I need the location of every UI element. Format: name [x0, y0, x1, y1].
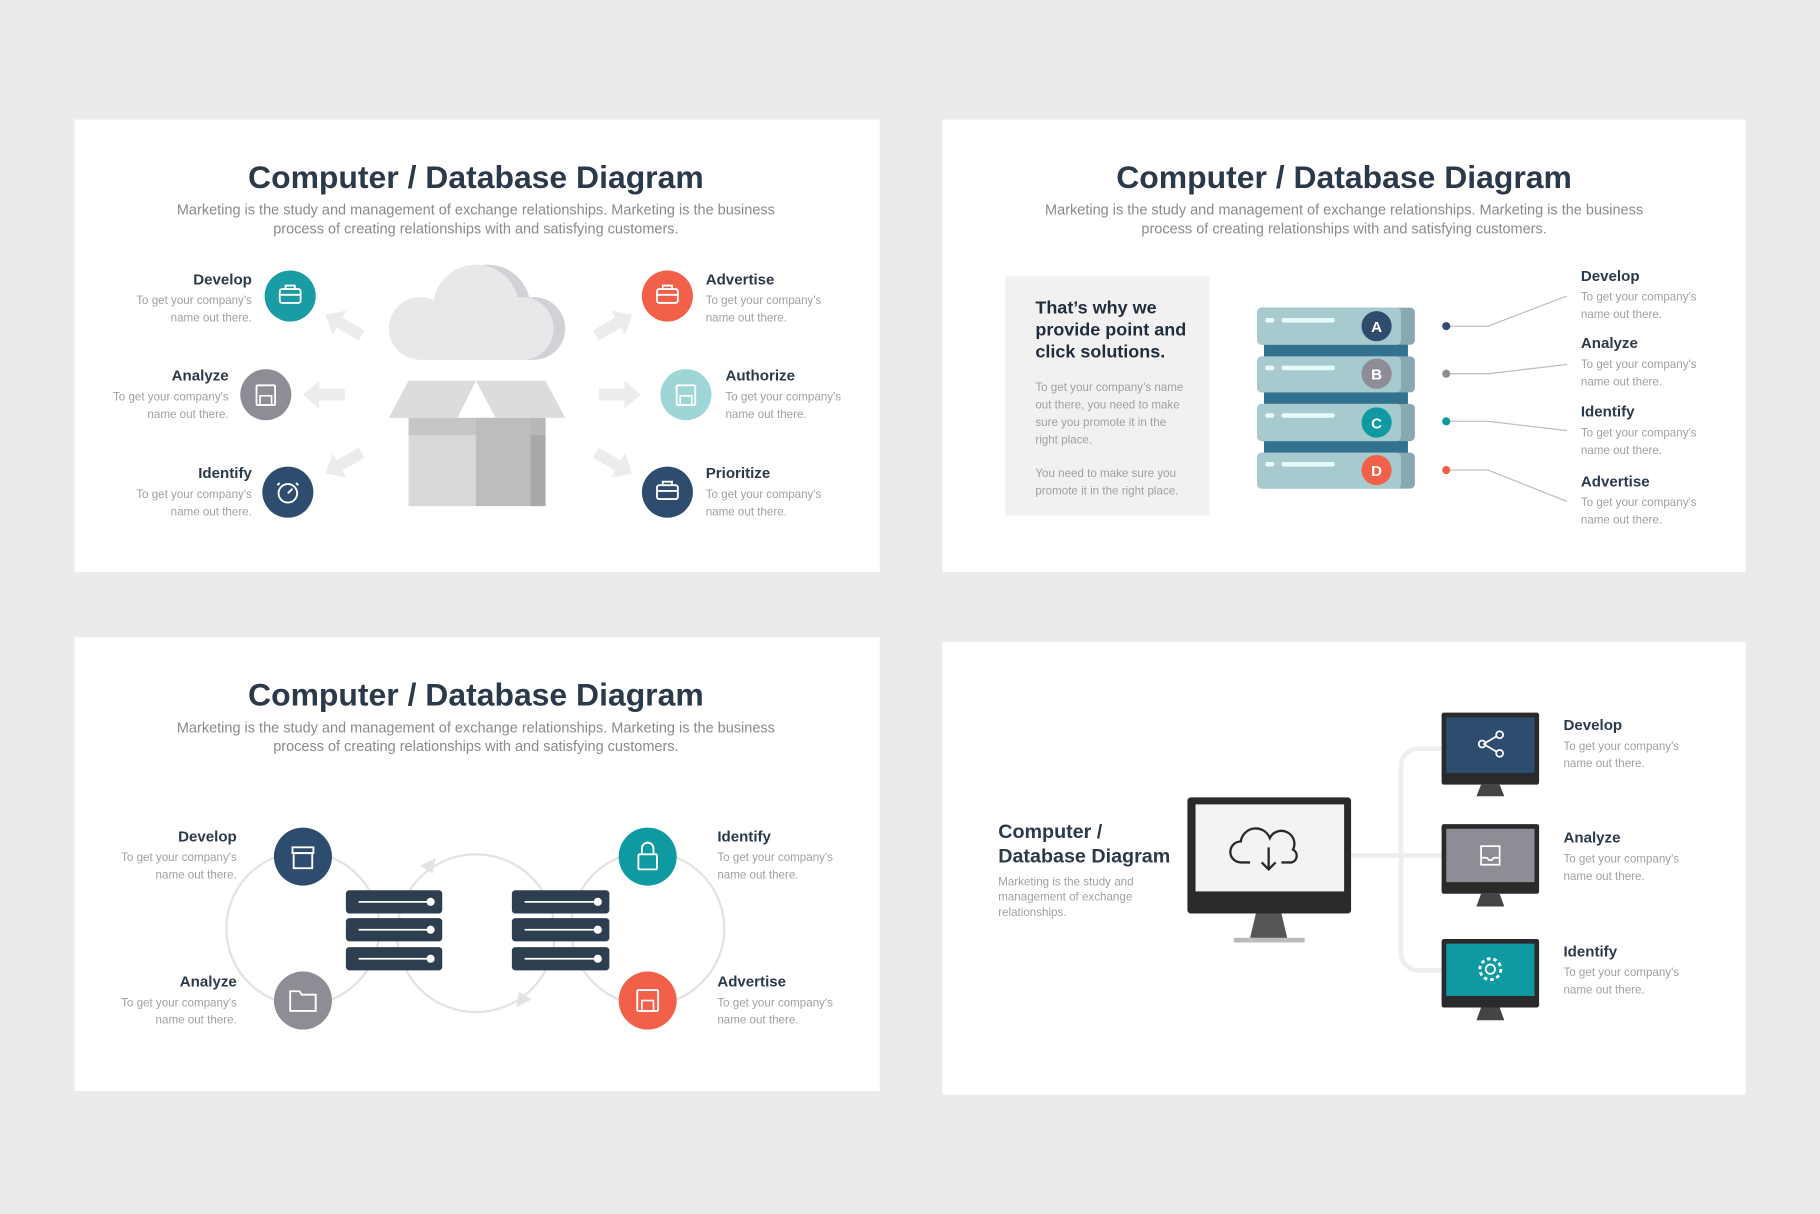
panel: server stack	[942, 120, 1746, 572]
text: advertise	[706, 271, 822, 325]
icon: open box	[389, 381, 565, 506]
text: develop: To get your company's	[121, 851, 237, 864]
text: advertise: Advertise	[1581, 473, 1650, 490]
description: relationships.	[998, 906, 1067, 919]
text: prioritize: To get your company's	[706, 488, 822, 501]
callout box: out there, you need to make	[1035, 399, 1180, 412]
text: prioritize	[706, 465, 822, 518]
panel: server cycle	[74, 638, 880, 1091]
text: identify	[717, 829, 833, 882]
callout box: promote it in the right place.	[1035, 484, 1178, 497]
text: authorize: To get your company's	[725, 390, 841, 403]
subtitle: process of creating relationships with and satisfying customers.	[273, 221, 679, 237]
subtitle	[177, 720, 775, 755]
callout box: click solutions.	[1035, 341, 1165, 361]
icon: monitor identify	[1442, 939, 1539, 1020]
callout box: right place.	[1035, 433, 1092, 446]
subtitle: Marketing is the study and management of exchange relationships. Marketing is the business	[1045, 203, 1643, 219]
subtitle	[1045, 203, 1643, 237]
text: analyze: Analyze	[172, 368, 229, 385]
cycle rings	[226, 852, 724, 1012]
title	[998, 821, 1170, 867]
text: analyze: Analyze	[180, 974, 237, 991]
text: prioritize: Prioritize	[706, 465, 770, 482]
text: authorize	[725, 368, 841, 421]
text: analyze: name out there.	[156, 1014, 237, 1027]
text: analyze: To get your company's	[1581, 358, 1697, 371]
title: Computer / Database Diagram	[1116, 159, 1572, 195]
text: identify: name out there.	[171, 505, 252, 518]
description: Marketing is the study and	[998, 876, 1134, 889]
title: Computer / Database Diagram	[248, 159, 704, 195]
text: develop: Develop	[1581, 268, 1640, 285]
text: develop	[136, 271, 252, 325]
text: develop: name out there.	[1581, 308, 1662, 321]
subtitle: Marketing is the study and management of exchange relationships. Marketing is the business	[177, 203, 775, 219]
text: develop: To get your company's	[136, 294, 252, 307]
text: advertise	[717, 974, 833, 1027]
icon: server stack: B	[1371, 367, 1382, 384]
icon: advertise	[642, 270, 693, 322]
description	[998, 876, 1134, 919]
text: develop: Develop	[193, 271, 252, 288]
connectors	[1351, 749, 1442, 970]
text: identify	[136, 465, 252, 518]
text: analyze	[1563, 830, 1679, 883]
text: develop	[121, 829, 237, 882]
text: analyze: To get your company's	[1563, 852, 1679, 865]
subtitle: Marketing is the study and management of exchange relationships. Marketing is the business	[177, 720, 775, 736]
text: develop: name out there.	[1563, 757, 1645, 770]
text: advertise: name out there.	[717, 1014, 799, 1027]
icon: server stack	[1257, 308, 1415, 489]
icon: server stack: D	[1371, 463, 1382, 480]
icon: servers left	[346, 890, 442, 970]
text: identify: name out there.	[1581, 444, 1662, 457]
text: develop: Develop	[178, 829, 237, 846]
text: advertise: Advertise	[706, 271, 774, 288]
text: advertise	[1581, 473, 1697, 526]
text: identify: Identify	[717, 829, 772, 846]
subtitle	[177, 203, 775, 237]
callout box: To get your company’s name	[1035, 381, 1183, 394]
icon: servers right	[512, 890, 609, 970]
icon: analyze	[274, 972, 332, 1030]
text: identify: Identify	[198, 465, 252, 482]
icon: prioritize	[642, 467, 693, 518]
subtitle: process of creating relationships with and satisfying customers.	[273, 739, 679, 755]
callout box	[1005, 276, 1209, 515]
text: advertise: name out there.	[706, 312, 787, 325]
callout box: sure you promote it in the	[1035, 416, 1166, 429]
text: advertise: name out there.	[1581, 513, 1662, 526]
text: identify: name out there.	[717, 869, 799, 882]
text: advertise: To get your company's	[717, 996, 833, 1009]
text: analyze: Analyze	[1581, 335, 1638, 352]
icon: develop	[265, 270, 316, 322]
text: identify: Identify	[1563, 943, 1618, 960]
text: analyze	[1581, 335, 1697, 388]
icon: main monitor	[1187, 797, 1351, 942]
text: authorize: name out there.	[725, 408, 807, 421]
text: analyze: To get your company's	[113, 390, 229, 403]
text: develop: name out there.	[156, 869, 237, 882]
callout box: You need to make sure you	[1035, 467, 1176, 480]
description: management of exchange	[998, 891, 1132, 904]
panel: cloud box diagram	[74, 120, 880, 572]
connectors	[1442, 296, 1567, 501]
text: advertise: To get your company's	[1581, 496, 1697, 509]
text: identify: To get your company's	[136, 488, 252, 501]
arrows	[303, 302, 641, 486]
icon: advertise	[619, 972, 677, 1030]
icon: cloud	[389, 265, 565, 360]
icon: develop	[274, 828, 332, 886]
text: develop	[1581, 268, 1697, 321]
text: identify: Identify	[1581, 404, 1635, 421]
text: identify: To get your company's	[1563, 966, 1679, 979]
text: identify: To get your company's	[1581, 426, 1697, 439]
icon: server stack: C	[1371, 415, 1382, 432]
text: develop	[1563, 717, 1679, 770]
text: analyze: name out there.	[1563, 870, 1645, 883]
text: identify: name out there.	[1563, 984, 1645, 997]
text: develop: Develop	[1563, 717, 1622, 734]
icon: identify	[619, 828, 677, 886]
text: analyze: name out there.	[147, 408, 229, 421]
title: Database Diagram	[998, 845, 1170, 867]
text: analyze: Analyze	[1563, 830, 1620, 847]
subtitle: process of creating relationships with and satisfying customers.	[1141, 221, 1547, 237]
text: develop: To get your company's	[1563, 740, 1679, 753]
text: advertise: Advertise	[717, 974, 786, 991]
text: develop: name out there.	[171, 312, 252, 325]
icon: monitor develop	[1442, 713, 1539, 796]
text: analyze	[121, 974, 237, 1027]
icon: server stack: A	[1371, 319, 1382, 336]
text: analyze: name out there.	[1581, 375, 1662, 388]
text: advertise: To get your company's	[706, 294, 822, 307]
title: Computer / Database Diagram	[248, 677, 704, 713]
title: Computer /	[998, 821, 1103, 843]
icon: identify	[262, 467, 313, 518]
callout box: provide point and	[1035, 319, 1186, 339]
text: analyze	[113, 368, 229, 421]
text: identify: To get your company's	[717, 851, 833, 864]
text: authorize: Authorize	[725, 368, 795, 385]
callout box: That’s why we	[1035, 297, 1157, 317]
text: develop: To get your company's	[1581, 291, 1697, 304]
text: prioritize: name out there.	[706, 505, 787, 518]
text: identify	[1563, 943, 1679, 997]
icon: authorize	[660, 369, 712, 420]
icon: analyze	[240, 369, 291, 420]
text: identify	[1581, 404, 1697, 457]
panel: monitors	[942, 642, 1746, 1094]
text: analyze: To get your company's	[121, 996, 237, 1009]
icon: monitor analyze	[1442, 824, 1539, 907]
